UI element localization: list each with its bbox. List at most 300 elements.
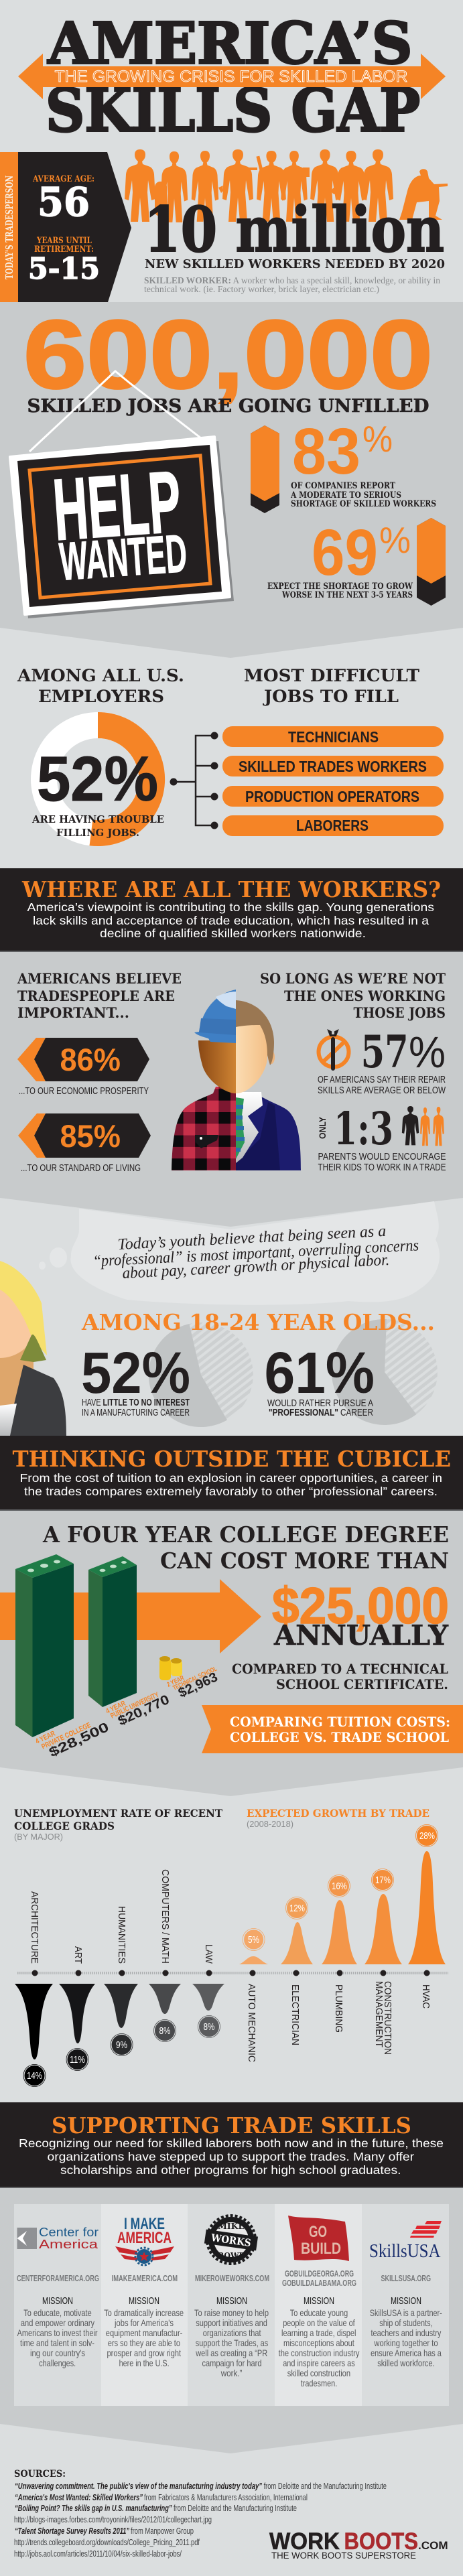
panel: unfilled jobs background [0, 302, 463, 658]
donut hole [57, 738, 139, 820]
logo top word: MIKE [218, 2222, 245, 2231]
label: construction: CONSTRUCTION [382, 1981, 393, 2055]
technical label 2: TECHNICAL SCHOOL [172, 1666, 218, 1692]
help: HELP [50, 452, 184, 559]
mission text: misconceptions about [283, 2337, 354, 2348]
definition line 1: SKILLED WORKER: A worker who has a special skill, knowledge, or ability in [144, 275, 440, 285]
caption: ...TO OUR STANDARD OF LIVING [21, 1162, 141, 1174]
label: computers math: COMPUTERS / MATH [159, 1869, 171, 1964]
years label: YEARS UNTIL [36, 236, 92, 246]
stat: 61 percent [264, 1341, 375, 1418]
logo gear [207, 2216, 255, 2264]
url: MIKEROWEWORKS.COM [195, 2273, 269, 2283]
value: 12: 12% [289, 1903, 305, 1914]
mission text: time and talent in solv- [20, 2337, 94, 2348]
mission text: To educate, motivate [23, 2307, 92, 2318]
source 5 origin: from Manpower Group [131, 2526, 194, 2536]
mission text: work.” [220, 2368, 243, 2378]
line 2: EMPLOYERS [38, 687, 164, 706]
body line 1: Recognizing our need for skilled laborers both now and in the future, these [19, 2137, 444, 2150]
line 3: IMPORTANT... [17, 1004, 129, 1021]
section banner: supporting trade skills [0, 2102, 463, 2188]
logo text: SkillsUSA [369, 2240, 441, 2262]
illustration: half tradesman half professional [172, 990, 301, 1170]
source 4: http://blogs-images.forbes.com/troyonink/files/2012/01/collegechart.jpg [14, 2514, 212, 2524]
money stack: private college [15, 1554, 74, 1737]
button [200, 1137, 202, 1140]
orange strip [0, 152, 18, 302]
mission label: MISSION [129, 2295, 159, 2307]
mission text: campaign for hard [202, 2358, 261, 2368]
ear [268, 1050, 275, 1064]
caption line 2: FILLING JOBS. [56, 827, 139, 839]
url: IMAKEAMERICA.COM [112, 2273, 178, 2283]
stat: 57 percent [318, 1026, 446, 1096]
left face [15, 1569, 32, 1737]
thought bubble [39, 1201, 440, 1305]
average age value: 56 [38, 179, 90, 225]
label: hvac: HVAC [420, 1984, 432, 2009]
mission text: To raise money to help [194, 2307, 269, 2318]
pie solid [149, 1324, 227, 1427]
value: 5 [243, 1928, 265, 1951]
value: 61% [264, 1341, 375, 1406]
label: architecture: ARCHITECTURE [29, 1891, 40, 1964]
mission text: well as creating a “PR [195, 2348, 267, 2358]
caption line 2: A MODERATE TO SERIOUS [290, 490, 401, 500]
band [0, 1436, 463, 1510]
bubble small [39, 1262, 46, 1270]
only label: ONLY [317, 1116, 328, 1139]
mission text: skilled construction [287, 2368, 350, 2378]
pill text: SKILLED TRADES WORKERS [239, 758, 427, 775]
sign white edge [10, 437, 230, 614]
label: law: LAW [203, 1944, 214, 1964]
logo bottom word: ROWE [218, 2251, 245, 2260]
caption line 2: WORSE IN THE NEXT 3-5 YEARS [281, 590, 413, 600]
sign orange frame [29, 456, 210, 598]
icon: dark worker [402, 1106, 419, 1145]
suit shade [236, 1102, 280, 1170]
quote line 2: “professional” is most important, overruling concerns [92, 1237, 419, 1270]
cost labels [34, 1666, 220, 1761]
mission text: ing our country's [30, 2348, 85, 2358]
body line 3: scholarships and other programs for high school graduates. [60, 2163, 401, 2177]
hat highlight [216, 992, 236, 1009]
drip: law [192, 1984, 224, 2011]
band [0, 2102, 463, 2187]
pie chart: 61 percent [332, 1319, 438, 1425]
source 3 title: “Boiling Point? The skills gap in U.S. manufacturing” [15, 2503, 172, 2513]
caption line 1: ARE HAVING TROUBLE [31, 813, 164, 825]
gauge [251, 425, 279, 513]
tall stack [159, 1658, 171, 1680]
mission text: people on the value of [283, 2317, 355, 2328]
title: America's: AMERICA’S [48, 11, 412, 78]
years value: 5-15 [28, 252, 100, 286]
mission text [104, 2307, 184, 2368]
subtitle: THE GROWING CRISIS FOR SKILLED LABOR [55, 68, 407, 86]
work: WORK [269, 2528, 340, 2555]
body line 2: the trades compares extremely favorably to other “professional” careers. [24, 1485, 438, 1498]
public label 2: PUBLIC UNIVERSITY [109, 1691, 160, 1720]
mission text: Americans to invest their [17, 2327, 98, 2338]
source 5 title: “Talent Shortage Survey Results 2011” [15, 2526, 129, 2536]
mission text: jobs for America's [114, 2317, 174, 2328]
peak: construction [365, 1894, 402, 1964]
mission text: organizations that [203, 2327, 261, 2338]
value: 57 [361, 1026, 409, 1078]
stat: 1 in 3 [317, 1102, 446, 1173]
icon: orange person [420, 1107, 430, 1146]
logo mark [17, 2228, 37, 2249]
line 2: THE ONES WORKING [284, 988, 446, 1004]
mission text: tradesmen. [301, 2378, 337, 2388]
arrow [0, 1579, 261, 1653]
ribbon line 2: COLLEGE VS. TRADE SCHOOL [230, 1729, 449, 1745]
logo text: AMERICA [117, 2229, 172, 2247]
pie stripes [189, 1323, 253, 1420]
organization card: i make america [101, 2204, 188, 2406]
technical value: $2,963 [176, 1670, 220, 1701]
caption line 1: HAVE LITTLE TO NO INTEREST [82, 1398, 190, 1408]
subhead: skilled jobs unfilled: SKILLED JOBS ARE GOING UNFILLED [27, 396, 429, 417]
growth heading: EXPECTED GROWTH BY TRADE [247, 1807, 429, 1820]
suit [236, 1093, 301, 1170]
body line 2: lack skills and acceptance of trade education, which has resulted in a [33, 914, 429, 927]
top face [88, 1556, 137, 1577]
axis labels [29, 1869, 432, 2062]
value: 11: 11% [70, 2054, 85, 2065]
badge: 85 percent [18, 1113, 151, 1174]
line 2: CAN COST MORE THAN [160, 1548, 449, 1574]
label: plumbing: PLUMBING [333, 1984, 344, 2033]
tie [236, 1097, 245, 1159]
heading: among 18-24 year olds: AMONG 18-24 YEAR OLDS... [81, 1309, 435, 1335]
mission label: MISSION [391, 2295, 421, 2307]
badge: 86 percent [17, 1038, 149, 1097]
body line 1: America’s viewpoint is contributing to the skills gap. Young generations [27, 900, 434, 914]
coin top [159, 1656, 170, 1662]
value: 14 [23, 2065, 46, 2086]
hard hat [194, 990, 236, 1043]
line 2: JOBS TO FILL [263, 687, 399, 706]
subhead: new workers needed: NEW SKILLED WORKERS NEEDED BY 2020 [145, 257, 445, 271]
mission text: To educate young [290, 2307, 348, 2318]
value: 14: 14% [27, 2070, 42, 2082]
heading: THINKING OUTSIDE THE CUBICLE [12, 1446, 451, 1472]
growth sub: (2008-2018) [247, 1819, 293, 1829]
drip: art [59, 1984, 95, 2043]
hair shadow [20, 1335, 46, 1362]
card [362, 2204, 449, 2406]
left face [88, 1570, 103, 1707]
quote line 1: Today’s youth believe that being seen as a [117, 1223, 387, 1253]
heading: college cost [42, 1521, 449, 1574]
headline: 600,000: 600,000 [23, 300, 433, 409]
right face [103, 1565, 137, 1707]
value: 17 [371, 1869, 394, 1891]
mission text: challenges. [39, 2358, 76, 2368]
peak: electrician [281, 1922, 313, 1964]
average age label: AVERAGE AGE: [32, 174, 94, 184]
cloud [70, 1201, 440, 1305]
caption line 1: OF COMPANIES REPORT [291, 481, 395, 491]
line 1: AMONG ALL U.S. [17, 666, 184, 685]
chart: growth by trade [239, 1825, 446, 1964]
mission text: ship of students, [379, 2317, 433, 2328]
logo wings [115, 2246, 174, 2260]
value: 52% [37, 744, 158, 815]
heading: most difficult jobs [244, 666, 419, 706]
heading: americans believe [17, 970, 182, 1021]
card [101, 2204, 188, 2406]
compared line 2: SCHOOL CERTIFICATE. [276, 1676, 448, 1692]
band edge [0, 1509, 463, 1511]
banner: comparing tuition costs [202, 1705, 463, 1753]
organization card: skillsusa [362, 2204, 449, 2406]
coin stacks [159, 1656, 182, 1680]
drip: computers [149, 1984, 181, 2014]
organization card: mike rowe works [188, 2204, 275, 2406]
mission text: working together to [374, 2337, 438, 2348]
value: 86% [60, 1042, 121, 1077]
icon: workers silhouettes [125, 149, 448, 222]
mission text: support initiatives and [196, 2317, 267, 2328]
dark plate [34, 1113, 151, 1158]
percent sign: % [379, 519, 411, 561]
value: 11 [66, 2049, 88, 2070]
source 2 title: “America's Most Wanted: Skilled Workers” [15, 2492, 143, 2502]
heading: so long as [260, 970, 446, 1021]
pill text: LABORERS [296, 817, 369, 834]
donut chart: 52 percent [31, 712, 165, 846]
ratio: 1:3 [334, 1102, 393, 1155]
value: 8 law [198, 2015, 220, 2038]
logo banner: WORKS [210, 2232, 252, 2249]
url: CENTERFORAMERICA.ORG [17, 2273, 99, 2283]
pill: laborers [222, 815, 444, 836]
pocket [195, 1135, 218, 1148]
drip: architecture [15, 1984, 53, 2059]
chevron [17, 1038, 46, 1081]
amount: $25,000 [272, 1578, 449, 1635]
money stack: public university [88, 1556, 137, 1707]
boots: BOOTS [344, 2528, 418, 2555]
pie solid [332, 1319, 417, 1425]
logo text: GO [309, 2223, 327, 2241]
mission text: prosper and grow right [107, 2348, 181, 2358]
gauge fill [251, 425, 279, 501]
source 1 title: “Unwavering commitment. The public's view of the manufacturing industry today” [15, 2481, 262, 2491]
heading: SUPPORTING TRADE SKILLS [52, 2112, 411, 2139]
shirt [0, 1404, 17, 1436]
wanted: WANTED [58, 523, 189, 592]
job list pills [222, 726, 444, 836]
private label: 4 YEAR [34, 1730, 56, 1746]
caption: ...TO OUR ECONOMIC PROSPERITY [19, 1085, 149, 1097]
source 6: http://trends.collegeboard.org/downloads/College_Pricing_2011.pdf [14, 2537, 200, 2547]
value: 16 [328, 1875, 350, 1897]
value: 8: 8% [159, 2025, 170, 2037]
quote line 3: about pay, career growth or physical labor. [122, 1251, 390, 1282]
value: 8 [154, 2019, 176, 2042]
public value: $20,770 [116, 1692, 172, 1729]
public label: 4 YEAR [105, 1700, 127, 1716]
pie stripes [385, 1319, 438, 1414]
chart headings [14, 1807, 429, 1842]
logo stripes [410, 2221, 442, 2238]
url: GOBUILDGEORGA.ORG [285, 2268, 354, 2279]
heading: among all employers [17, 666, 184, 706]
right face [32, 1564, 74, 1737]
logo: workboots.com [269, 2528, 448, 2561]
coin top [171, 1658, 182, 1664]
jacket [0, 1365, 66, 1436]
dark plate [34, 1038, 149, 1081]
section banner: thinking outside the cubicle [0, 1436, 463, 1511]
illustration: young woman [0, 1261, 66, 1436]
caption line 3: SHORTAGE OF SKILLED WORKERS [291, 499, 436, 509]
card [14, 2204, 101, 2406]
logo flag [288, 2216, 349, 2261]
body line 1: From the cost of tuition to an explosion in career opportunities, a career in [20, 1471, 442, 1485]
chart axis [17, 1970, 448, 1976]
stat: 69 percent [267, 516, 446, 606]
donut remainder [31, 712, 165, 846]
neck [0, 1347, 34, 1414]
tagline: THE WORK BOOTS SUPERSTORE [271, 2550, 416, 2561]
panel: tuition background [0, 1511, 463, 1796]
mission text: support the Trades, as [196, 2337, 268, 2348]
unemployment heading line 1: UNEMPLOYMENT RATE OF RECENT [14, 1807, 222, 1820]
mission text: To dramatically increase [104, 2307, 184, 2318]
value: 9 [111, 2034, 133, 2055]
caption line 1: EXPECT THE SHORTAGE TO GROW [267, 582, 413, 592]
value: 52% [81, 1341, 190, 1406]
mission text: equipment manufactur- [106, 2327, 183, 2338]
panel: perception background [0, 952, 463, 1227]
heading: WHERE ARE ALL THE WORKERS? [21, 876, 441, 902]
help wanted sign [10, 371, 234, 618]
line 3: THOSE JOBS [354, 1004, 446, 1021]
logo text: I MAKE [124, 2215, 165, 2233]
url: SKILLSUSA.ORG [381, 2273, 431, 2283]
line 2: TRADESPEOPLE ARE [17, 988, 175, 1004]
unemployment sub: (BY MAJOR) [14, 1832, 63, 1842]
mission text: ensure America has a [371, 2348, 442, 2358]
url: GOBUILDALABAMA.ORG [282, 2278, 356, 2288]
mission label: MISSION [216, 2295, 247, 2307]
sign shadow [13, 441, 234, 618]
organization card: center for america [14, 2204, 101, 2406]
plaid shirt [172, 1087, 236, 1170]
value: 16: 16% [332, 1881, 347, 1892]
mission text [194, 2307, 269, 2378]
ribbon [202, 1705, 463, 1753]
title: Skills Gap: SKILLS GAP [46, 75, 420, 145]
value: 9: 9% [116, 2039, 127, 2051]
logo gear [135, 2248, 153, 2265]
value: 28: 28% [419, 1830, 435, 1842]
value: 69 [312, 516, 378, 589]
face left [198, 1040, 236, 1093]
connector tree [170, 732, 218, 829]
logo text: BUILD [301, 2240, 341, 2258]
peak: plumbing [322, 1900, 357, 1964]
pill text: PRODUCTION OPERATORS [245, 788, 419, 805]
panel: today's tradesperson [0, 152, 131, 302]
percent sign: % [362, 418, 393, 460]
mission text: skilled workforce. [377, 2358, 435, 2368]
peak: hvac [408, 1851, 446, 1964]
card [188, 2204, 275, 2406]
face [0, 1290, 32, 1358]
annually: ANNUALLY [273, 1619, 449, 1651]
dot com: .COM [418, 2539, 448, 2552]
value: 83 [292, 415, 360, 488]
caption line 1: WOULD RATHER PURSUE A [267, 1398, 373, 1409]
white shirt [236, 1092, 263, 1163]
mission text: learning a trade, dispel [281, 2327, 356, 2338]
band edge [0, 951, 463, 952]
private value: $28,500 [47, 1720, 111, 1761]
tie stripes [236, 1107, 245, 1150]
source 1 origin: from Deloitte and the Manufacturing Institute [264, 2481, 387, 2491]
mission text [17, 2307, 98, 2368]
drip: humanities [104, 1984, 138, 2028]
caption line 2: IN A MANUFACTURING CAREER [82, 1408, 190, 1418]
pill: production operators [222, 786, 444, 807]
band [0, 868, 463, 951]
caption line 2: "PROFESSIONAL" CAREER [269, 1408, 373, 1418]
mission text: SkillsUSA is a partner- [370, 2307, 442, 2318]
source 7: http://jobs.aol.com/articles/2011/10/04/six-skilled-labor-jobs/ [14, 2549, 182, 2559]
gauge [417, 518, 446, 606]
sources [14, 2469, 387, 2559]
hat shade [199, 1018, 236, 1035]
retirement label: RETIREMENT: [34, 245, 94, 255]
icon: orange person [433, 1107, 444, 1146]
section banner: where are all the workers [0, 868, 463, 952]
ribbon line 1: COMPARING TUITION COSTS: [230, 1714, 450, 1730]
vertical label: TODAY'S TRADESPERSON [3, 176, 15, 279]
mission label: MISSION [304, 2295, 334, 2307]
double arrow [18, 54, 446, 99]
band edge [0, 2187, 463, 2188]
mission text: ers so they are able to [108, 2337, 180, 2348]
short stack [171, 1660, 182, 1676]
value: 12 [285, 1897, 308, 1919]
callout: 25000 annually [232, 1578, 449, 1692]
line 1: A FOUR YEAR COLLEGE DEGREE [42, 1521, 449, 1548]
pill: skilled trades [222, 756, 444, 776]
mission text: teachers and industry [371, 2327, 441, 2338]
value: 5: 5% [248, 1934, 259, 1946]
label: auto mechanic: AUTO MECHANIC [246, 1984, 257, 2062]
mission text [370, 2307, 442, 2368]
source 3 origin: from Deloitte and the Manufacturing Institute [174, 2503, 297, 2513]
body line 3: decline of qualified skilled workers nationwide. [100, 927, 366, 940]
pill text: TECHNICIANS [288, 728, 379, 746]
hair [236, 1000, 274, 1065]
mission text [279, 2307, 359, 2388]
panel: organizations background [0, 2188, 463, 2453]
pill: technicians [222, 726, 444, 747]
percent: % [409, 1027, 446, 1077]
peak: auto mechanic [239, 1956, 268, 1964]
label: art: ART [72, 1946, 84, 1964]
